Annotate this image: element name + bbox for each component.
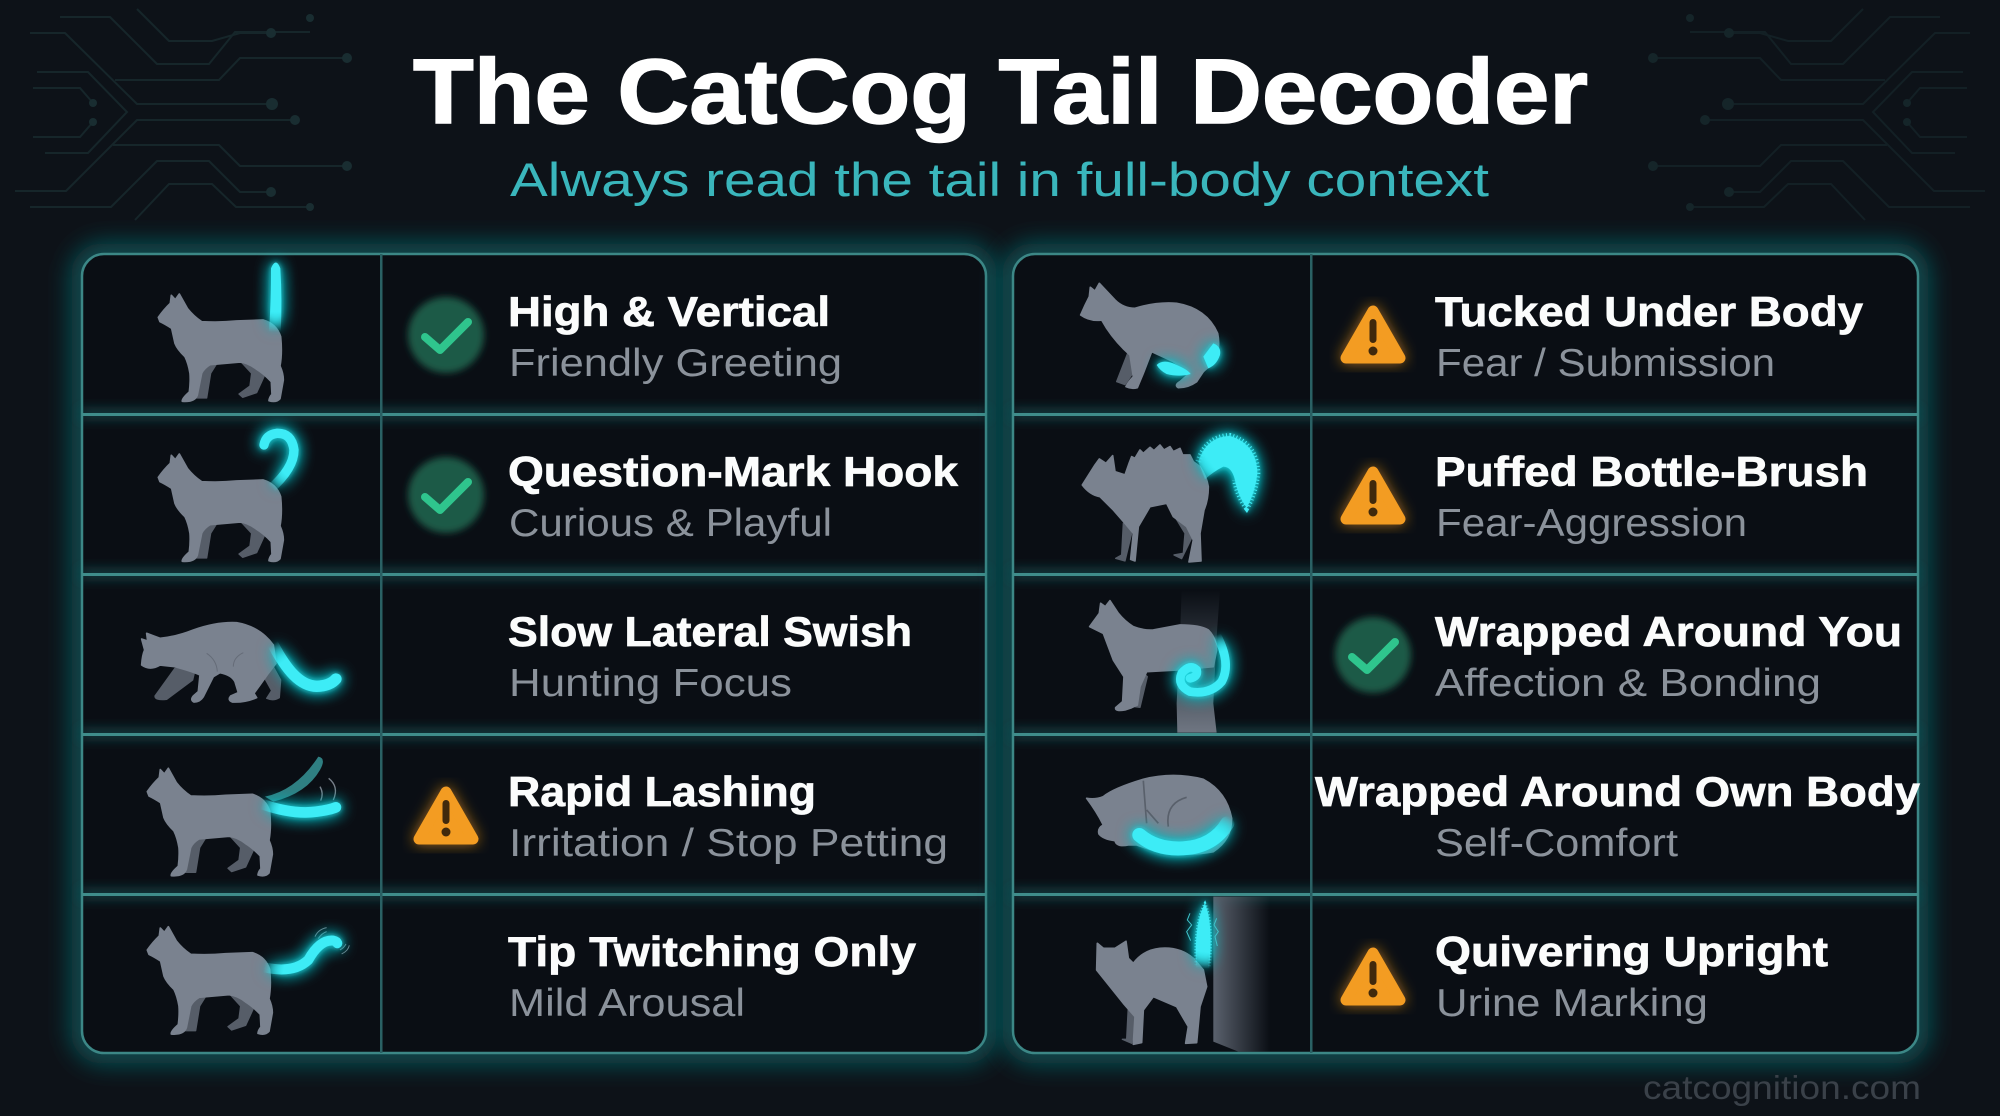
- icon: green check: [408, 297, 484, 373]
- meaning: Affection & Bonding: [1435, 662, 1821, 705]
- subtitle: Always read the tail in full-body context: [510, 153, 1489, 206]
- heading: Tip Twitching Only: [508, 928, 917, 975]
- heading: Quivering Upright: [1435, 928, 1828, 975]
- heading: Wrapped Around Own Body: [1315, 768, 1921, 815]
- icon: green check: [1335, 617, 1411, 693]
- icon: cat, tail wrapped around a leg: [1090, 590, 1226, 733]
- meaning: Hunting Focus: [509, 662, 792, 705]
- icon: cat, twitching tail tip: [147, 927, 349, 1034]
- icon: curled cat, tail around body: [1087, 775, 1232, 854]
- row: Tip Twitching Only: [147, 927, 917, 1034]
- meaning: Mild Arousal: [509, 982, 745, 1025]
- heading: Wrapped Around You: [1435, 608, 1902, 655]
- icon: cat, tail tucked under body: [1081, 283, 1220, 388]
- icon: cat, tail high and vertical: [158, 262, 283, 401]
- heading: High & Vertical: [508, 288, 830, 335]
- icon: warning triangle: [419, 792, 473, 839]
- icon: cat, hooked tail: [158, 433, 294, 561]
- heading: Tucked Under Body: [1435, 288, 1864, 335]
- footer: website: catcognition.com: [1643, 1069, 1921, 1106]
- panel: left column: [80, 254, 988, 1053]
- decoration: circuit traces left: [15, 9, 352, 220]
- meaning: Friendly Greeting: [509, 342, 842, 385]
- icon: green check: [408, 457, 484, 533]
- heading: Question-Mark Hook: [508, 448, 959, 495]
- icon: warning triangle: [1346, 311, 1400, 358]
- icon: arched cat at wall, quivering tail: [1097, 897, 1270, 1052]
- row: Quivering Upright: [1097, 897, 1828, 1052]
- row: Puffed Bottle-Brush: [1082, 436, 1868, 562]
- icon: cat crouching, low swishing tail: [142, 623, 336, 702]
- heading: Slow Lateral Swish: [508, 608, 912, 655]
- meaning: Curious & Playful: [509, 502, 832, 545]
- decoration: circuit traces right: [1648, 9, 1985, 220]
- row: Tucked Under Body: [1081, 283, 1864, 388]
- row: Wrapped Around Own Body: [1087, 768, 1921, 865]
- meaning: Self-Comfort: [1435, 822, 1678, 865]
- heading: Rapid Lashing: [508, 768, 816, 815]
- row: Question-Mark Hook: [158, 433, 959, 561]
- meaning: Urine Marking: [1436, 982, 1708, 1025]
- panel: right column: [1011, 254, 1921, 1053]
- icon: warning triangle: [1346, 953, 1400, 1000]
- meaning: Fear / Submission: [1436, 342, 1775, 385]
- row: Wrapped Around You: [1090, 590, 1902, 733]
- icon: arched cat, puffed tail: [1082, 436, 1257, 562]
- icon: cat, rapidly lashing tail: [147, 757, 336, 876]
- title: The CatCog Tail Decoder: [413, 41, 1588, 143]
- heading: Puffed Bottle-Brush: [1435, 448, 1868, 495]
- meaning: Irritation / Stop Petting: [509, 822, 948, 865]
- icon: warning triangle: [1346, 472, 1400, 519]
- meaning: Fear-Aggression: [1436, 502, 1747, 545]
- row: High & Vertical: [158, 262, 842, 401]
- row: Rapid Lashing: [147, 757, 948, 876]
- row: Slow Lateral Swish: [142, 608, 912, 705]
